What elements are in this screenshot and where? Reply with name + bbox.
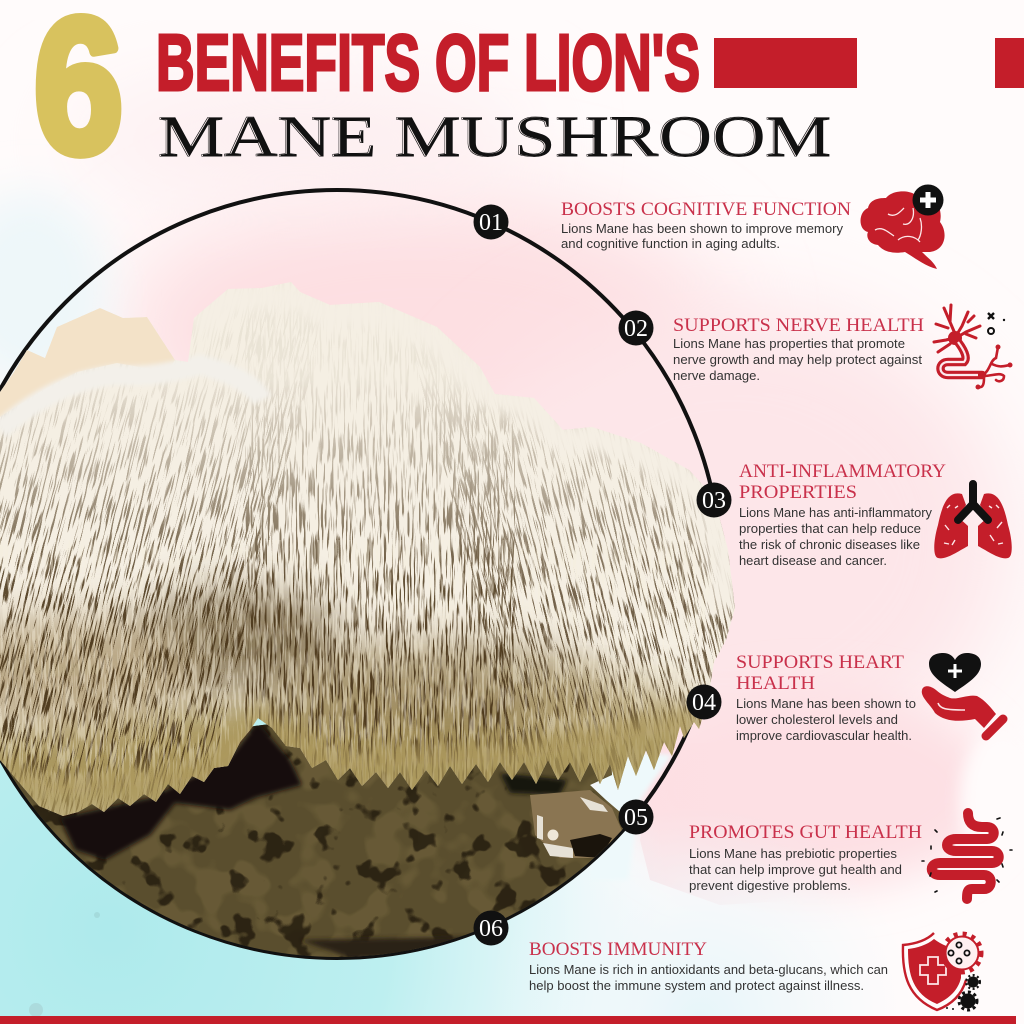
text block: supports nerve health: nerve damage. xyxy=(673,369,760,383)
text block: supports nerve health: Lions Mane has properties that promote xyxy=(673,337,905,351)
text block: anti-inflammatory properties: ANTI-INFLAMMATORY xyxy=(739,461,946,482)
text block: anti-inflammatory properties xyxy=(739,461,946,568)
icon: nerve cell xyxy=(934,305,1012,390)
text block: anti-inflammatory properties: PROPERTIES xyxy=(739,482,857,503)
badge 04: 04 xyxy=(692,690,716,716)
red header bars xyxy=(714,38,1024,88)
text block: anti-inflammatory properties: Lions Mane has anti-inflammatory xyxy=(739,506,933,520)
bottom red bar xyxy=(0,1016,1016,1024)
text block: boosts immunity: BOOSTS IMMUNITY xyxy=(529,939,707,960)
text block: supports heart health: Lions Mane has been shown to xyxy=(736,697,916,711)
text block: promotes gut health xyxy=(689,822,922,893)
text block: boosts immunity: Lions Mane is rich in antioxidants and beta-glucans, which can xyxy=(529,963,888,977)
icon: intestines xyxy=(922,813,1012,899)
badge 02: 02 xyxy=(624,316,648,342)
badge 03: 03 xyxy=(702,488,726,514)
white front lobe crest xyxy=(0,365,262,430)
text block: supports nerve health xyxy=(673,315,924,383)
badge 02 xyxy=(618,310,654,346)
badge 04 xyxy=(686,684,722,720)
text block: anti-inflammatory properties: properties that can help reduce xyxy=(739,522,921,536)
icon: heart in hand xyxy=(922,653,1003,736)
hair texture xyxy=(0,312,735,816)
text block: boosts immunity: help boost the immune system and protect against illness. xyxy=(529,979,864,993)
text block: boosts cognitive function: BOOSTS COGNITIVE FUNCTION xyxy=(561,199,851,220)
icon: lungs xyxy=(934,484,1012,558)
text block: boosts cognitive function xyxy=(561,199,851,251)
heading: benefits of lion's: BENEFITS OF LION'S xyxy=(156,18,700,107)
badge 03 xyxy=(696,482,732,518)
badge 05 xyxy=(618,800,654,834)
text block: promotes gut health: prevent digestive problems. xyxy=(689,879,851,893)
icon: shield with virus xyxy=(903,933,981,1010)
text block: boosts cognitive function: and cognitive function in aging adults. xyxy=(561,237,780,251)
text block: supports nerve health: SUPPORTS NERVE HEALTH xyxy=(673,315,924,336)
badge 06 xyxy=(474,910,508,946)
text block: supports heart health: HEALTH xyxy=(736,673,815,694)
badge 05: 05 xyxy=(624,805,648,831)
text block: anti-inflammatory properties: the risk of chronic diseases like xyxy=(739,538,920,552)
timeline circle xyxy=(0,190,721,958)
tan lower band xyxy=(2,698,702,816)
heading: mane mushroom: MANE MUSHROOM xyxy=(158,104,831,169)
badge 01 xyxy=(474,204,508,240)
text block: supports heart health: SUPPORTS HEART xyxy=(736,652,904,673)
ground under mushroom xyxy=(7,724,623,957)
icon: brain with plus xyxy=(860,184,945,269)
text block: promotes gut health: Lions Mane has prebiotic properties xyxy=(689,847,897,861)
white top glow xyxy=(194,295,728,608)
text block: supports heart health: lower cholesterol levels and xyxy=(736,713,898,727)
text block: promotes gut health: PROMOTES GUT HEALTH xyxy=(689,822,922,843)
text block: supports heart health: improve cardiovascular health. xyxy=(736,729,912,743)
text block: supports nerve health: nerve growth and may help protect against xyxy=(673,353,923,367)
badge 06: 06 xyxy=(479,916,503,942)
badge 01: 01 xyxy=(479,210,503,236)
text block: supports heart health xyxy=(736,652,916,743)
text block: promotes gut health: that can help improve gut health and xyxy=(689,863,902,877)
text block: boosts cognitive function: Lions Mane has been shown to improve memory xyxy=(561,222,844,236)
peach rear lobe xyxy=(0,308,175,417)
text block: boosts immunity xyxy=(529,939,888,993)
text block: anti-inflammatory properties: heart disease and cancer. xyxy=(739,554,887,568)
mushroom xyxy=(0,282,735,816)
